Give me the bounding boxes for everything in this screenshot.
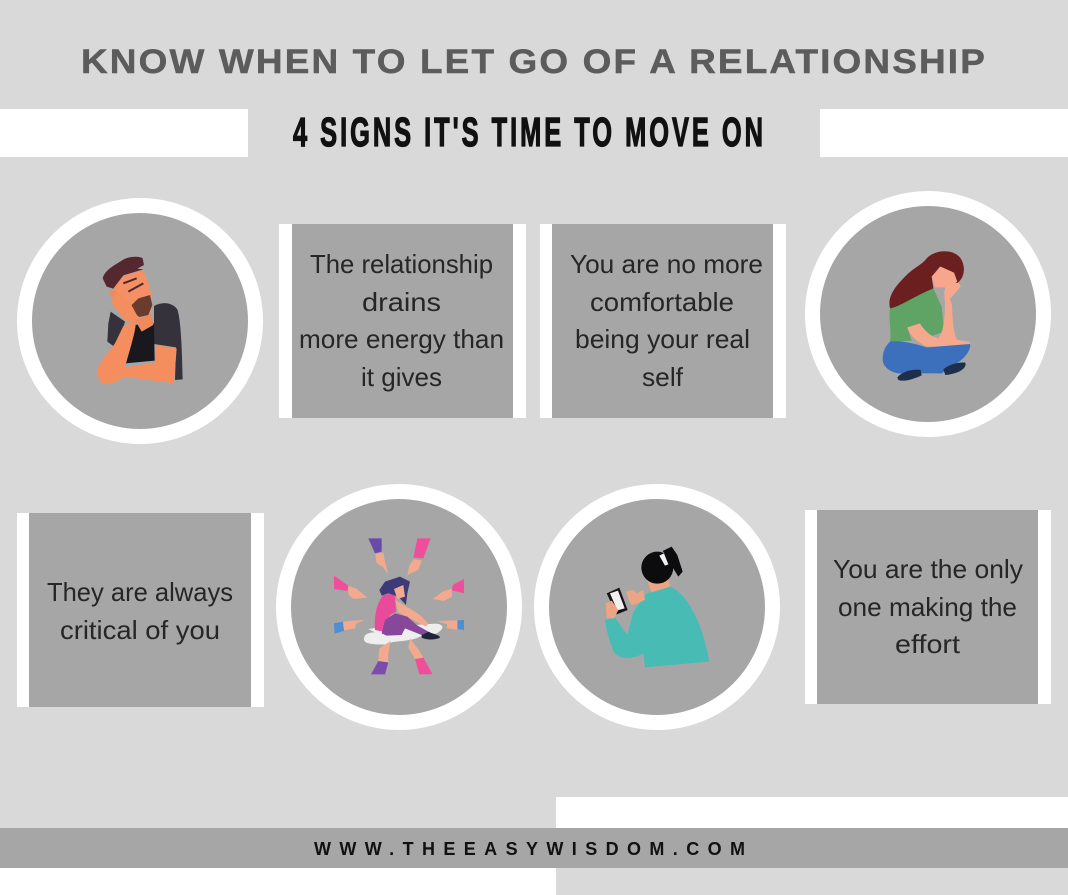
- icon: woman on phone: [605, 547, 709, 667]
- icon: woman surrounded by pointing hands: [334, 538, 464, 674]
- panel: sign 1 illustration circle: [24, 206, 256, 436]
- panel: sign 3 text: [17, 513, 264, 707]
- panel: sign 1 text: more energy than: [299, 324, 504, 354]
- footer: WWW.THEEASYWISDOM.COM: [314, 839, 745, 859]
- panel: sign 2 illustration circle: [812, 198, 1044, 430]
- title: KNOW WHEN TO LET GO OF A RELATIONSHIP: [81, 43, 987, 81]
- panel: sign 3 text: They are always: [47, 577, 233, 607]
- panel: sign 4 text: [805, 510, 1051, 704]
- panel: sign 4 text: one making the: [838, 592, 1017, 622]
- panel: sign 2 text: comfortable: [590, 287, 734, 317]
- panel: sign 3 illustration circle: [284, 492, 514, 722]
- panel: sign 1 text: [279, 224, 526, 418]
- panel: sign 1 text: The relationship: [310, 249, 493, 279]
- icon: tired man: [97, 257, 183, 384]
- panel: sign 1 text: drains: [362, 287, 441, 317]
- footer: [0, 797, 1068, 895]
- panel: sign 2 text: self: [642, 362, 684, 392]
- icon: sad woman: [883, 251, 970, 381]
- panel: sign 4 illustration circle: [542, 492, 772, 722]
- subtitle banner: [0, 109, 1068, 157]
- panel: sign 1 text: it gives: [361, 362, 442, 392]
- panel: sign 2 text: being your real: [575, 324, 750, 354]
- panel: sign 2 text: You are no more: [570, 249, 763, 279]
- panel: sign 4 text: You are the only: [833, 554, 1023, 584]
- panel: sign 3 text: critical of you: [60, 615, 220, 645]
- subtitle banner: 4 SIGNS IT'S TIME TO MOVE ON: [293, 110, 763, 156]
- panel: sign 4 text: effort: [895, 629, 961, 659]
- panel: sign 2 text: [540, 224, 786, 418]
